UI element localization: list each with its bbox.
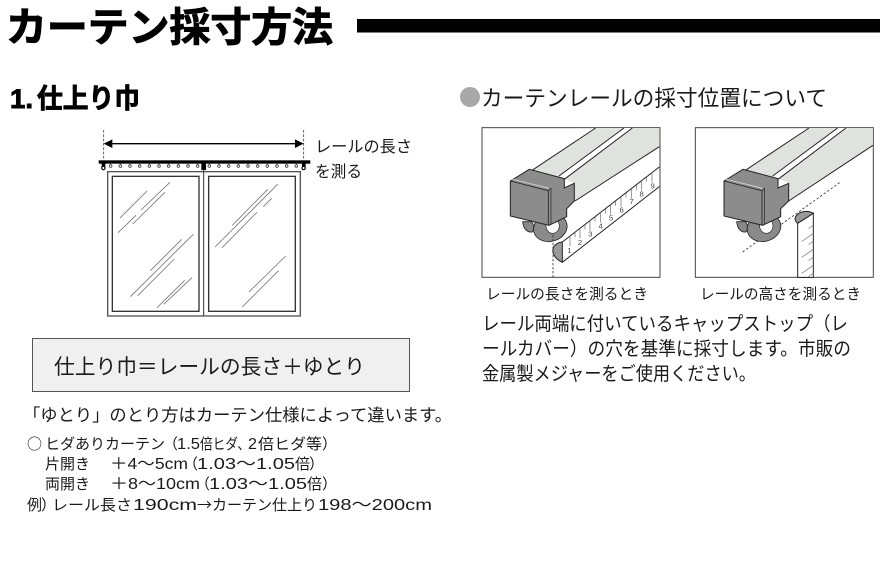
text: explanation: 金属製メジャーをご使用ください。 <box>482 363 756 385</box>
text: allowance details: 2 <box>248 436 257 453</box>
tape numbers: 7 <box>630 197 634 206</box>
text: allowance details: → <box>197 494 212 515</box>
tape measure <box>562 167 659 262</box>
formula box: 仕上り巾＝レールの長さ＋ゆとり <box>54 356 365 379</box>
title rule <box>357 19 880 32</box>
heading: rail measuring position: カーテンレールの採寸位置について <box>481 86 827 111</box>
text: allowance details: ） <box>41 497 56 514</box>
tape numbers: 3 <box>588 230 592 239</box>
label: rail length: を測る <box>315 163 362 181</box>
text: allowance details: 倍 <box>295 456 310 473</box>
tape numbers: 2 <box>578 238 582 247</box>
end cap <box>510 169 574 225</box>
label: rail length: レールの長さ <box>315 138 412 156</box>
text: allowance details: ） <box>309 456 324 473</box>
heading: section 1: 1. <box>10 84 33 114</box>
tape numbers: 4 <box>599 222 604 231</box>
text: explanation: ールカバー）の穴を基準に採寸します。市販の <box>482 338 851 360</box>
tape numbers: 5 <box>609 214 613 223</box>
heading: section 1: 仕上り巾 <box>37 84 140 114</box>
tape numbers: 9 <box>651 181 655 190</box>
text: allowance details: ヒダありカーテン <box>45 436 165 453</box>
text: allowance details: （ <box>183 456 198 473</box>
caption: length: レールの長さを測るとき <box>486 286 648 303</box>
dimension arrow <box>104 130 304 158</box>
text: allowance details: （ <box>163 436 178 453</box>
rail <box>530 128 659 201</box>
text: allowance details: 片開き <box>45 456 90 473</box>
tape numbers: 6 <box>620 205 624 214</box>
text: allowance details: ○ <box>27 433 42 454</box>
text: allowance details: 1.03〜1.05 <box>209 476 307 493</box>
runner wheel <box>737 222 748 232</box>
text: allowance details: 198〜200cm <box>318 497 432 514</box>
glass reflections <box>118 182 286 308</box>
text: allowance details: 例 <box>27 497 42 514</box>
text: allowance details: 1.5 <box>177 436 200 453</box>
tape numbers <box>567 181 655 255</box>
dashed height line <box>743 182 840 252</box>
text: allowance details: 両開き <box>45 476 90 493</box>
caption: height: レールの高さを測るとき <box>700 286 861 303</box>
rail <box>743 128 873 201</box>
text: allowance details: 190cm <box>133 497 197 514</box>
formula box <box>32 338 410 392</box>
text: allowance details: 倍 <box>307 476 322 493</box>
panel: measuring rail length <box>482 128 660 277</box>
tape numbers: 8 <box>640 189 644 198</box>
text: allowance details: （ <box>195 476 210 493</box>
title: カーテン採寸方法 <box>6 6 333 50</box>
tape numbers: 1 <box>567 246 571 255</box>
text: allowance details: カーテン仕上り <box>212 497 317 514</box>
text: allowance details <box>27 433 432 515</box>
panel: measuring rail height <box>695 128 873 277</box>
runner wheel <box>523 222 534 232</box>
text: allowance details: レール長さ <box>52 497 132 514</box>
text: allowance details: 倍ヒダ等 <box>258 435 322 453</box>
curtain rail <box>99 160 310 170</box>
vertical tape measure <box>798 213 813 277</box>
text: allowance details: ） <box>322 436 337 453</box>
text: explanation <box>482 313 851 385</box>
window frame <box>108 170 300 316</box>
end cap <box>724 169 789 225</box>
text: allowance details: ＋8〜10cm <box>110 476 200 493</box>
window diagram <box>99 130 310 316</box>
text: allowance note: 「ゆとり」のとり方はカーテン仕様によって違います。 <box>23 406 452 425</box>
text: allowance details: ＋4〜5cm <box>110 456 188 473</box>
text: allowance details: ） <box>322 476 337 493</box>
text: allowance details: 1.03〜1.05 <box>197 456 295 473</box>
text: allowance details: 倍ヒダ、 <box>200 436 250 453</box>
label: rail length <box>315 138 412 181</box>
text: explanation: レール両端に付いているキャップストップ（レ <box>482 313 848 335</box>
